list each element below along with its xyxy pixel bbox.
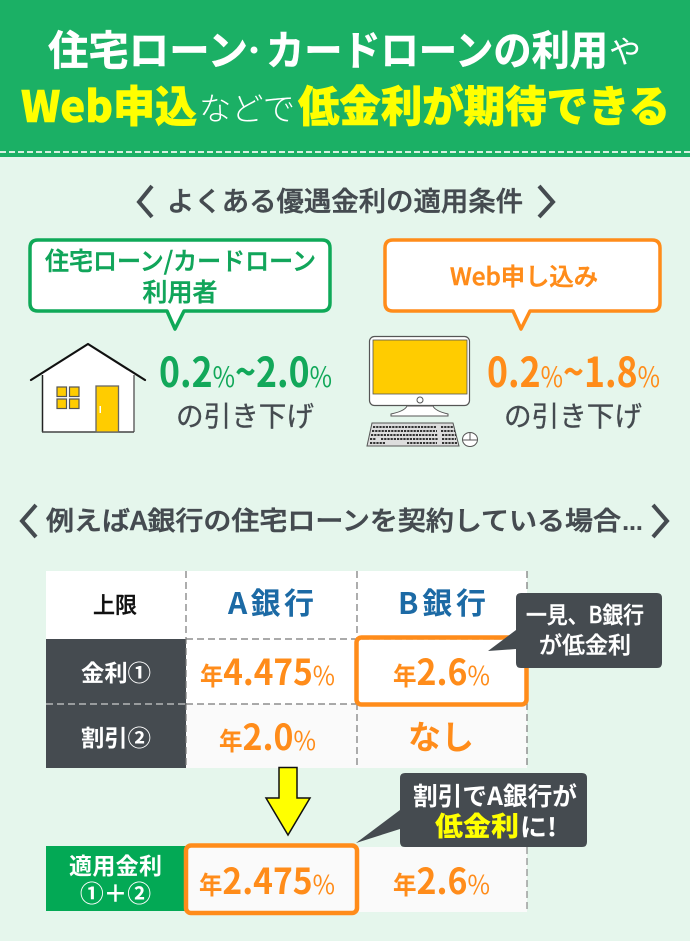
- row label: interest rate: 金利①: [81, 654, 151, 688]
- highlight box: bank B rate: [356, 638, 526, 704]
- rate range: housing/card loan: [159, 339, 332, 435]
- title line 1: [48, 17, 641, 77]
- header banner: [0, 0, 690, 157]
- row label: discount: 割引②: [81, 719, 151, 753]
- callout: bank A becomes cheaper: に!: [520, 808, 557, 844]
- row label: applied rate: ①＋②: [80, 874, 151, 909]
- title line 1: カードローンの利用: [266, 17, 608, 77]
- section heading: example: 例えばA銀行の住宅ローンを契約している場合: [46, 501, 621, 538]
- table header: upper limit: 上限: [93, 588, 137, 620]
- callout: bank B looks cheaper: 一見、B銀行: [526, 596, 644, 630]
- rate range: web application: [487, 339, 660, 435]
- table header: bank B: B銀行: [398, 579, 486, 623]
- bank A rate: 年4.475%: [200, 644, 335, 696]
- row label: applied rate: [46, 846, 186, 911]
- speech bubble: housing/card loan users: 住宅ローン/カードローン: [45, 242, 316, 278]
- rate range: housing/card loan: 0.2%~2.0%: [159, 339, 332, 399]
- bank A discount: 年2.0%: [219, 709, 316, 761]
- highlight box: bank A applied rate: [186, 846, 357, 913]
- speech bubble: web application: Web申し込み: [450, 257, 598, 292]
- section heading: common preferential conditions: よくある優遇金利の適用条件: [167, 180, 523, 219]
- bank A applied rate: 年2.475%: [199, 853, 335, 905]
- callout: bank A becomes cheaper: 割引でA銀行が: [413, 777, 577, 813]
- speech bubble: web application: [385, 240, 660, 329]
- callout: bank B looks cheaper: [488, 593, 662, 668]
- bank B discount: none: なし: [408, 711, 474, 759]
- title line 2: 低金利が期待できる: [298, 73, 670, 135]
- title line 2: などで: [199, 84, 295, 130]
- speech bubble: housing/card loan users: 利用者: [142, 273, 218, 309]
- section heading: example: ...: [622, 506, 643, 536]
- row label: applied rate: 適用金利: [69, 847, 162, 881]
- callout: bank B looks cheaper: が低金利: [539, 626, 631, 660]
- comparison table: [46, 571, 527, 768]
- arrow: down: [266, 768, 310, 835]
- title line 1: 住宅ローン: [48, 17, 248, 77]
- icon: desktop computer: [367, 336, 478, 446]
- speech bubble: housing/card loan users: [30, 240, 330, 329]
- title line 2: Web申込: [21, 73, 197, 135]
- table header: bank A: A銀行: [227, 579, 314, 623]
- icon: house: [31, 344, 145, 432]
- bank B applied rate: 年2.6%: [393, 853, 490, 905]
- title line 2: [21, 73, 670, 135]
- result row: [46, 846, 527, 913]
- callout: bank A becomes cheaper: [356, 773, 587, 847]
- callout: bank A becomes cheaper: 低金利: [435, 805, 519, 844]
- bank B rate: 年2.6%: [393, 644, 490, 696]
- title line 1: や: [609, 27, 641, 72]
- rate range: housing/card loan: の引き下げ: [176, 395, 314, 435]
- rate range: web application: 0.2%~1.8%: [487, 339, 660, 399]
- rate range: web application: の引き下げ: [504, 395, 642, 435]
